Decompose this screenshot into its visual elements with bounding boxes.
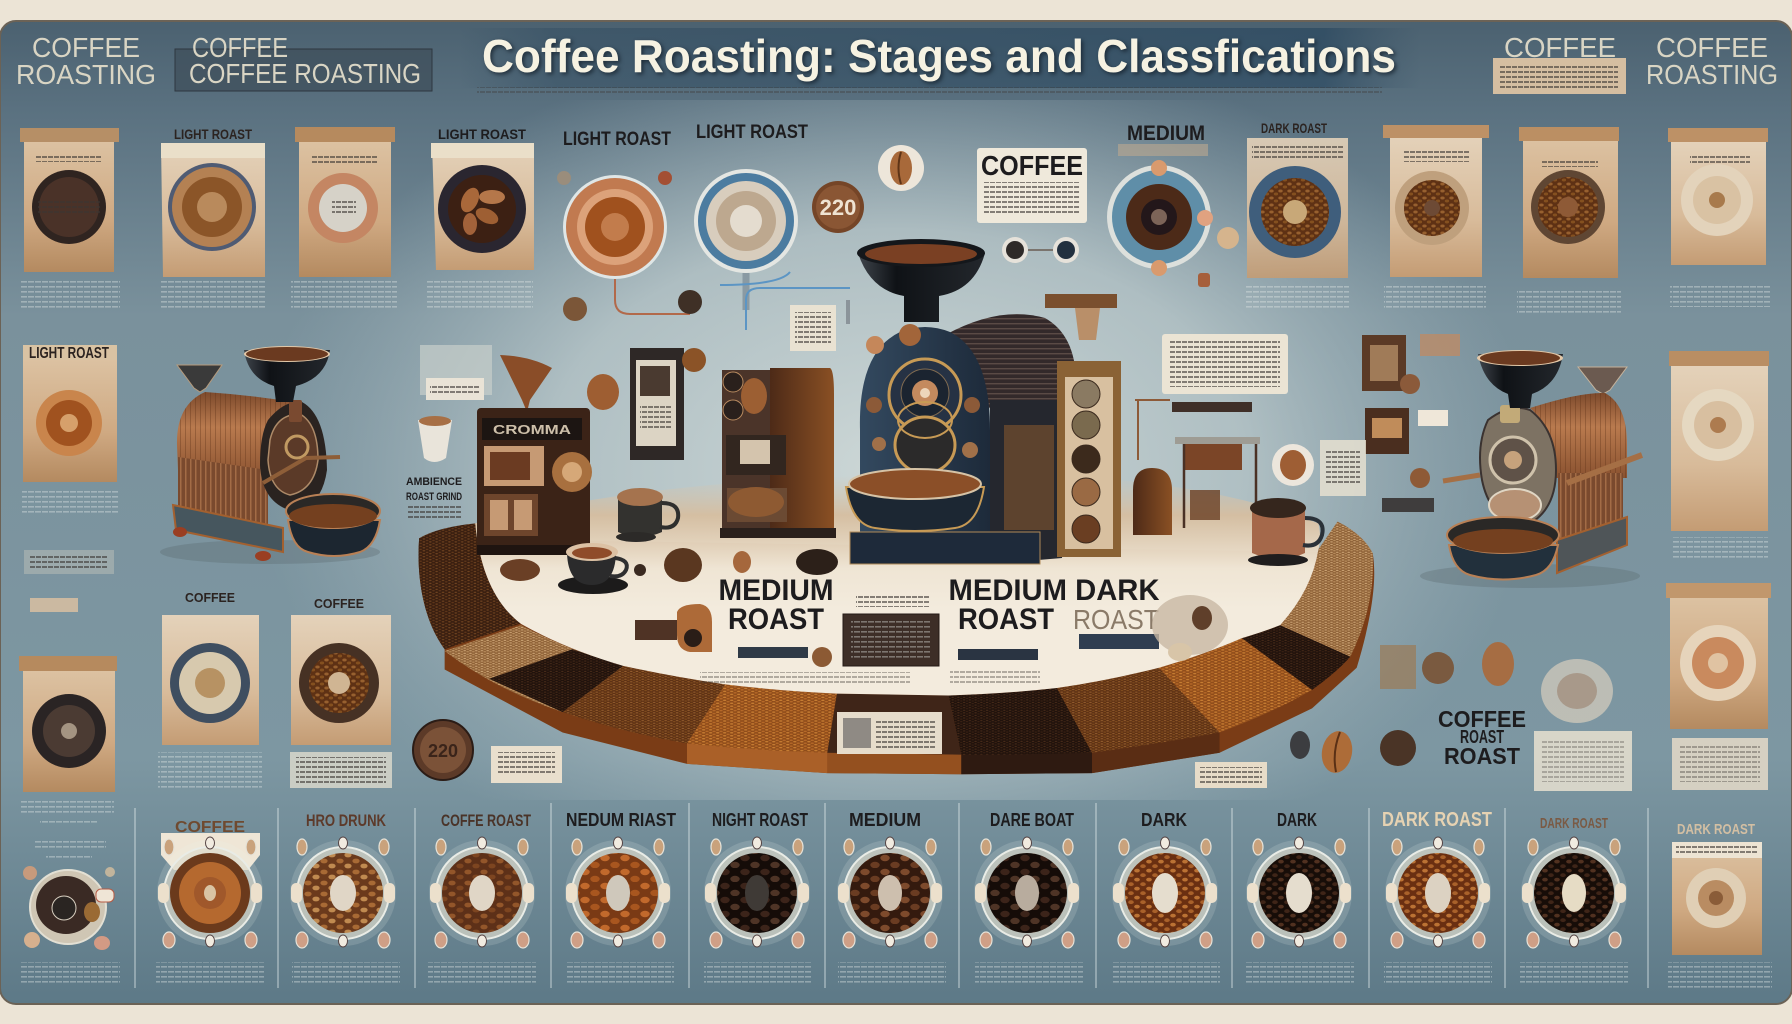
base: [173, 505, 283, 552]
medium dark roast label: MEDIUM DARK: [948, 574, 1160, 607]
medium medallion: [1107, 160, 1239, 287]
copper drum: [177, 392, 292, 480]
top row: bag 4: [427, 126, 534, 308]
copper mug: [1248, 498, 1323, 566]
machine: grinder with cone: [477, 355, 592, 555]
dark roast bag: DARK ROAST: [1261, 120, 1327, 136]
stage 10: DARK: [1277, 810, 1317, 830]
platform cream surface: [475, 474, 1320, 695]
roast segment: near black: [1242, 625, 1350, 690]
scattered beans on table: [500, 548, 838, 582]
machine: grinder with cone: CROMMA: [493, 422, 572, 437]
stage 1: [20, 820, 120, 986]
tray: [288, 520, 380, 556]
header box with repeated label: COFFEE: [192, 32, 288, 63]
handle: [263, 457, 340, 483]
stage 9: [1112, 810, 1220, 986]
title: Coffee Roasting: Stages and Classfications: [482, 30, 1396, 82]
stage 9: DARK: [1141, 810, 1187, 830]
stage 12: [1520, 815, 1628, 986]
medium dark roast label: [948, 574, 1160, 636]
stage 4: COFFE ROAST: [441, 811, 531, 830]
left bag lower: [19, 656, 117, 816]
mid-left bag B: [290, 596, 392, 788]
light roast label A: LIGHT ROAST: [563, 129, 671, 150]
stage 5: [565, 810, 676, 986]
stage 8: DARE BOAT: [990, 810, 1074, 830]
small funnel: [177, 365, 222, 392]
top row: bag 1: [20, 128, 120, 308]
header tags right: COFFEE: [1504, 32, 1616, 63]
hopper: [1478, 354, 1563, 408]
roast segment: orange: [1159, 638, 1312, 732]
left label fragment: [24, 550, 114, 612]
top row: bag 3: [291, 127, 397, 308]
cooling tray: [846, 469, 984, 531]
cabinet with roast samples: [1057, 361, 1121, 557]
light roast medallion B: [694, 169, 850, 330]
header tag far right: ROASTING: [1646, 59, 1778, 90]
medium roast label: ROAST: [728, 603, 824, 636]
header tags right: [1493, 32, 1626, 94]
stage 7: MEDIUM: [849, 810, 921, 830]
coffee mug dark: [616, 488, 678, 542]
top row: bag 7: [1668, 128, 1770, 307]
mid-left bag A: [158, 590, 262, 788]
header box with repeated label: COFFEE ROASTING: [189, 58, 421, 89]
coin badge: [413, 720, 473, 780]
hopper: [857, 239, 985, 322]
stage 6: [704, 810, 812, 986]
stage 2: [156, 819, 264, 986]
left bag mid: [22, 345, 118, 514]
header tags left: COFFEE: [32, 32, 140, 63]
roast segment: black: [949, 688, 1092, 755]
bottom row dividers: [135, 803, 1648, 988]
coffee callout: COFFEE: [981, 150, 1083, 181]
coffee cup on saucer: [558, 543, 628, 594]
roast segment: tan and dark: [445, 625, 623, 712]
header tags left: ROASTING: [16, 59, 156, 90]
front disc: [260, 402, 327, 512]
stage 10: [1246, 810, 1354, 986]
table screen and bars: [700, 594, 1159, 686]
header box with repeated label: [175, 32, 432, 91]
stage 2: COFFEE: [175, 819, 245, 836]
coffee roast label right: ROAST: [1460, 727, 1504, 747]
light roast label B: LIGHT ROAST: [696, 122, 808, 143]
stage 5: NEDUM RIAST: [566, 810, 676, 830]
stage 13 bag: DARK ROAST: [1677, 821, 1755, 838]
top row: bag 2: LIGHT ROAST: [174, 126, 252, 142]
temperature badge: [812, 181, 864, 233]
stage 8: [974, 810, 1083, 986]
stage 4: [428, 811, 536, 986]
medium roast label: [718, 574, 834, 636]
hopper: [244, 350, 330, 402]
header tag far right: COFFEE: [1656, 32, 1768, 63]
right bag lower: [1666, 583, 1771, 790]
left roaster: [160, 346, 380, 564]
left notes beside roaster: [406, 345, 492, 520]
right bag upper: [1669, 351, 1769, 559]
copper boiler: [1133, 468, 1172, 535]
roast segment: chestnut: [1057, 668, 1220, 753]
handles: [1443, 475, 1480, 481]
front disc: [1480, 408, 1556, 526]
coin badge: 220: [428, 741, 458, 761]
stage 12: DARK ROAST: [1540, 815, 1608, 832]
tray: [1449, 545, 1558, 580]
medium dark roast label: ROAST: [958, 603, 1054, 636]
card in roast segment: [837, 712, 942, 754]
top row: bag 6: [1517, 127, 1621, 314]
icon: large coffee bean: [1290, 729, 1355, 775]
lower ribbed box: [178, 457, 268, 530]
coffee roast label right: ROAST: [1444, 743, 1520, 769]
stage 13 bag: [1668, 821, 1772, 988]
small note left of platform: [491, 746, 562, 783]
dark roast bag: [1245, 120, 1349, 310]
small workshop table: [1135, 400, 1260, 528]
coffee roast label right: COFFEE: [1438, 706, 1526, 732]
cluster right of platform: [1195, 642, 1632, 791]
small plaque: [1045, 294, 1117, 340]
text note panel: [1162, 334, 1288, 394]
header tag far right: [1646, 32, 1778, 90]
roast segment: dark with card: [827, 694, 961, 755]
medium label: MEDIUM: [1127, 122, 1205, 145]
copper drum: [1530, 393, 1627, 478]
left notes beside roaster: AMBIENCE: [406, 476, 462, 488]
temperature badge: 220: [820, 195, 856, 220]
mid-left bag A: COFFEE: [185, 590, 235, 605]
coffee roast label right: [1438, 706, 1526, 769]
light roast medallion A: [557, 171, 702, 321]
stage 3: [290, 811, 400, 986]
machine: gauge panel: [587, 348, 706, 460]
left bag mid: LIGHT ROAST: [29, 345, 109, 362]
top row: bag 5: [1383, 125, 1489, 310]
mid-left bag B: COFFEE: [314, 596, 364, 611]
left notes beside roaster: ROAST GRIND: [406, 491, 462, 503]
stage 6: NIGHT ROAST: [712, 810, 808, 830]
icon: coffee bean badge: [878, 145, 924, 191]
main roaster: [846, 239, 1076, 564]
stage 11: DARK ROAST: [1382, 809, 1492, 831]
medium label: [1118, 122, 1208, 156]
lower ribbed box: [1558, 473, 1623, 548]
machine: cabinet roaster: [720, 368, 836, 538]
top row: bag 4: LIGHT ROAST: [438, 126, 526, 142]
small funnel: [1578, 367, 1627, 394]
table tools: [635, 595, 1228, 667]
medium roast label: MEDIUM: [718, 574, 834, 607]
stage 3: HRO DRUNK: [306, 811, 387, 830]
base: [1557, 517, 1627, 573]
stage 7: [837, 810, 946, 986]
top row: bag 2: [160, 126, 266, 308]
header tags left: [16, 32, 156, 90]
roast segment: light tan: [1280, 522, 1373, 657]
roast segment: brown: [563, 666, 725, 744]
roast segment: darkest left: [419, 523, 521, 649]
note strip: [720, 272, 850, 351]
coffee callout: [977, 148, 1087, 223]
roast segment: warm brown: [687, 684, 837, 753]
right mid icons cluster: [1272, 334, 1460, 512]
platform: [419, 474, 1374, 774]
small icons under callout: [1002, 237, 1079, 263]
medium dark roast label: ROAST: [1073, 604, 1159, 635]
platform wooden rim: [419, 538, 1374, 774]
right roaster: [1420, 350, 1642, 588]
stage 11: [1382, 809, 1492, 986]
